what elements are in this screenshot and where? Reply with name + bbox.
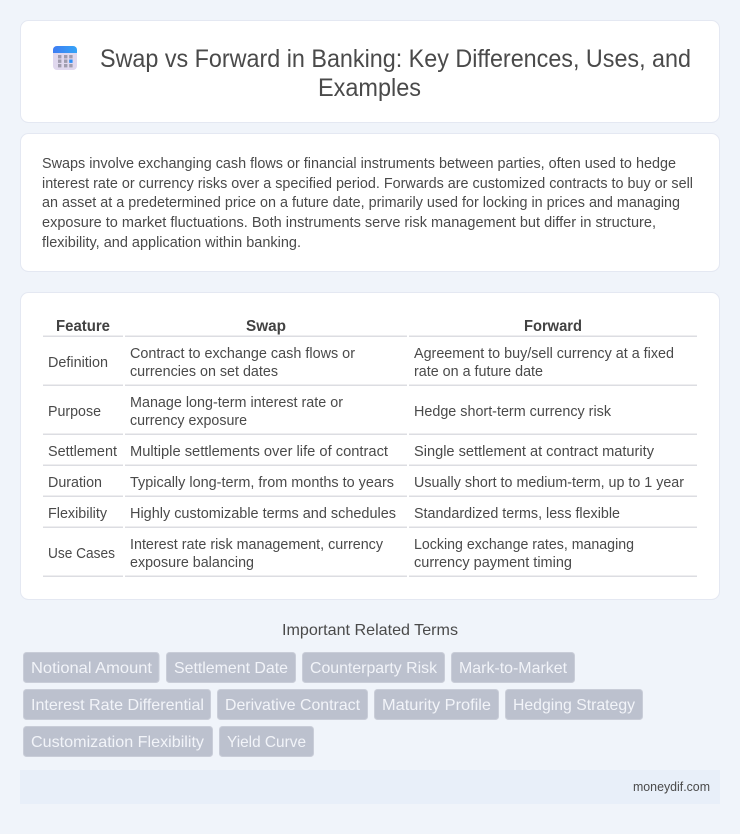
row: definition: rate on a future date xyxy=(414,364,543,380)
row: flexibility: Standardized terms, less flexible xyxy=(414,506,620,522)
row: flexibility: Highly customizable terms and schedules xyxy=(130,506,396,522)
icon: calendar xyxy=(53,46,77,70)
row: purpose: Purpose xyxy=(48,404,101,420)
row: duration: Usually short to medium-term, up to 1 year xyxy=(414,475,684,491)
related term tags: Counterparty Risk xyxy=(310,660,438,677)
related term tags: Derivative Contract xyxy=(225,697,361,714)
related term tags: Hedging Strategy xyxy=(513,697,635,714)
row: flexibility xyxy=(48,506,620,522)
row: purpose: Hedge short-term currency risk xyxy=(414,404,612,420)
related term tags: Maturity Profile xyxy=(382,697,491,714)
panel: comparison table xyxy=(20,292,720,600)
row: definition: Definition xyxy=(48,355,108,371)
row: use cases: Use Cases xyxy=(48,546,115,562)
related term tags xyxy=(24,652,642,756)
heading: related terms: Important Related Terms xyxy=(282,622,458,639)
title: Examples xyxy=(318,74,421,102)
panel: header xyxy=(20,20,720,122)
row: definition xyxy=(48,346,674,380)
panel: intro text: interest rate or currency risks over a specified period. Forwards are customized contracts to buy or sell xyxy=(42,176,693,192)
row: definition: Agreement to buy/sell currency at a fixed xyxy=(414,346,674,362)
footer bar: moneydif.com xyxy=(633,780,710,794)
footer bar xyxy=(20,770,720,804)
title: Swap vs Forward in Banking: Key Differences, Uses, and xyxy=(100,45,691,73)
row: definition: currencies on set dates xyxy=(130,364,278,380)
table header: Forward xyxy=(524,318,582,335)
table header: Feature xyxy=(56,318,110,335)
panel: intro text xyxy=(20,134,720,272)
row: duration: Duration xyxy=(48,475,102,491)
panel: intro text: Swaps involve exchanging cash flows or financial instruments between parties, often used to hedge xyxy=(42,156,676,172)
row: purpose: currency exposure xyxy=(130,413,247,429)
row: purpose: Manage long-term interest rate or xyxy=(130,395,343,411)
related term tags: Interest Rate Differential xyxy=(31,697,204,714)
table header: Swap xyxy=(246,318,286,335)
row: settlement: Single settlement at contract maturity xyxy=(414,444,655,460)
related term tags: Settlement Date xyxy=(174,660,288,677)
row: duration xyxy=(48,475,684,491)
row: purpose xyxy=(48,395,612,429)
table header xyxy=(56,318,582,335)
panel: intro text: exposure to market fluctuations. Both instruments serve risk management but differ in structure, xyxy=(42,215,656,231)
panel: intro text: an asset at a predetermined price on a future date, primarily used for locking in prices and managing xyxy=(42,195,680,211)
row: use cases xyxy=(48,537,634,571)
related term tags: Customization Flexibility xyxy=(31,734,204,751)
related term tags: Notional Amount xyxy=(31,660,153,677)
panel: intro text: flexibility, and application within banking. xyxy=(42,235,301,251)
title xyxy=(100,45,691,102)
row: settlement xyxy=(48,444,655,460)
row: use cases: Interest rate risk management, currency xyxy=(130,537,384,553)
row: flexibility: Flexibility xyxy=(48,506,108,522)
row: definition: Contract to exchange cash flows or xyxy=(130,346,355,362)
row: settlement: Settlement xyxy=(48,444,117,460)
row: use cases: exposure balancing xyxy=(130,555,254,571)
row: duration: Typically long-term, from months to years xyxy=(130,475,394,491)
row: settlement: Multiple settlements over life of contract xyxy=(130,444,388,460)
row: use cases: currency payment timing xyxy=(414,555,572,571)
related term tags: Mark-to-Market xyxy=(459,660,568,677)
row: use cases: Locking exchange rates, managing xyxy=(414,537,634,553)
related term tags: Yield Curve xyxy=(227,734,306,751)
